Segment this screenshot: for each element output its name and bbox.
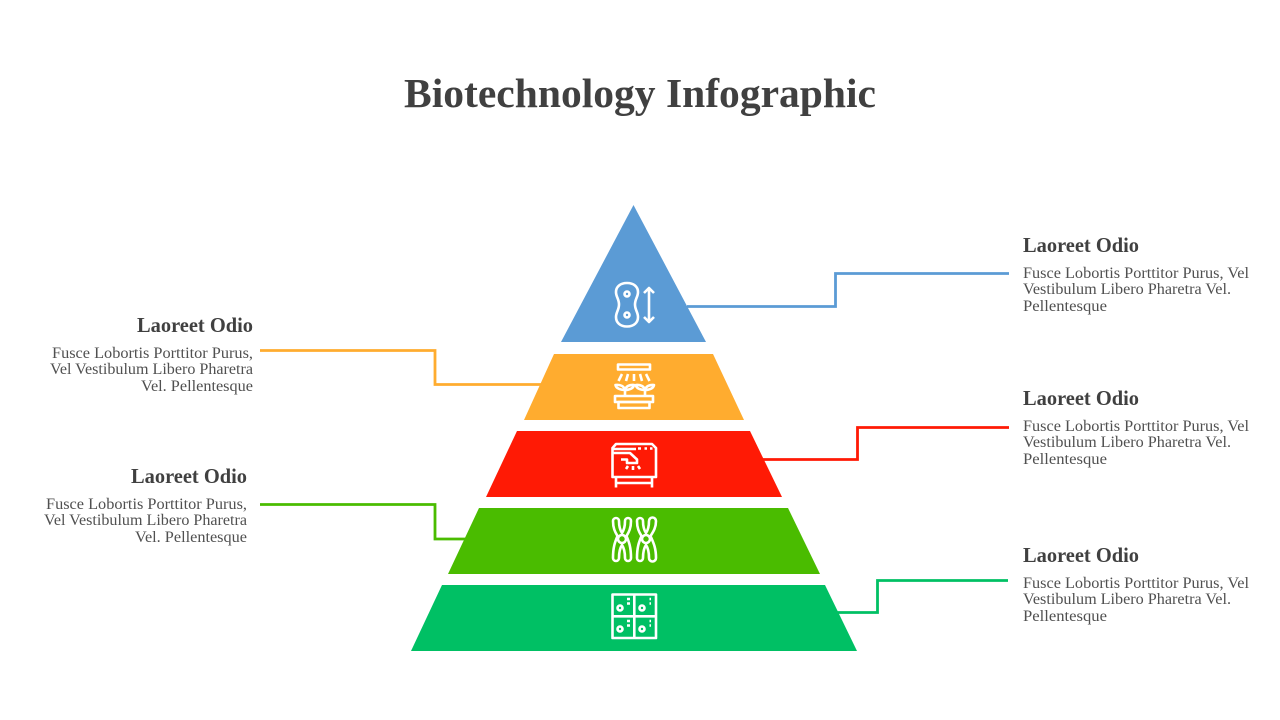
pyramid tier 5: teal — [411, 585, 857, 651]
text block: middle right: Laoreet Odio — [1023, 386, 1139, 410]
pyramid tier 4: green — [448, 508, 820, 574]
connector: orange — [260, 350, 542, 384]
icon: lab machine — [612, 444, 656, 488]
text block: middle right — [1023, 386, 1250, 468]
text block: top right: Laoreet Odio — [1023, 233, 1139, 257]
text block: middle right: Pellentesque — [1023, 451, 1107, 468]
title: Biotechnology Infographic — [404, 70, 876, 116]
text block: top right — [1023, 233, 1250, 315]
connector: red — [763, 428, 1009, 460]
text block: top right: Fusce Lobortis Porttitor Purus, Vel — [1023, 265, 1250, 282]
icon: chromosomes — [613, 518, 656, 562]
text block: lower left: Vel Vestibulum Libero Pharetra — [44, 512, 247, 529]
text block: bottom right: Pellentesque — [1023, 608, 1107, 625]
icon: cell culture plate — [612, 594, 656, 638]
text block: upper left: Vel. Pellentesque — [141, 378, 253, 395]
text block: lower left — [44, 464, 247, 546]
text block: upper left: Fusce Lobortis Porttitor Purus, — [52, 345, 253, 362]
text block: top right: Vestibulum Libero Pharetra Vel. — [1023, 281, 1231, 298]
text block: lower left: Laoreet Odio — [131, 464, 247, 488]
icon: cell division — [616, 283, 654, 326]
pyramid tier 2: orange — [524, 354, 744, 420]
connector: green — [260, 504, 468, 539]
text block: lower left: Fusce Lobortis Porttitor Purus, — [46, 496, 247, 513]
pyramid tier 3: red — [486, 431, 782, 497]
connector: blue — [687, 274, 1009, 306]
text block: lower left: Vel. Pellentesque — [135, 529, 247, 546]
text block: upper left: Vel Vestibulum Libero Pharetra — [50, 361, 253, 378]
text block: middle right: Fusce Lobortis Porttitor Purus, Vel — [1023, 418, 1250, 435]
text block: top right: Pellentesque — [1023, 298, 1107, 315]
text block: middle right: Vestibulum Libero Pharetra Vel. — [1023, 434, 1231, 451]
text block: bottom right: Laoreet Odio — [1023, 543, 1139, 567]
text block: upper left — [50, 313, 253, 395]
text block: upper left: Laoreet Odio — [137, 313, 253, 337]
connector: teal — [836, 580, 1008, 612]
text block: bottom right — [1023, 543, 1250, 625]
icon: plants under lamp — [615, 364, 654, 408]
text block: bottom right: Vestibulum Libero Pharetra Vel. — [1023, 591, 1231, 608]
pyramid tier 1: blue — [561, 205, 706, 342]
text block: bottom right: Fusce Lobortis Porttitor Purus, Vel — [1023, 575, 1250, 592]
